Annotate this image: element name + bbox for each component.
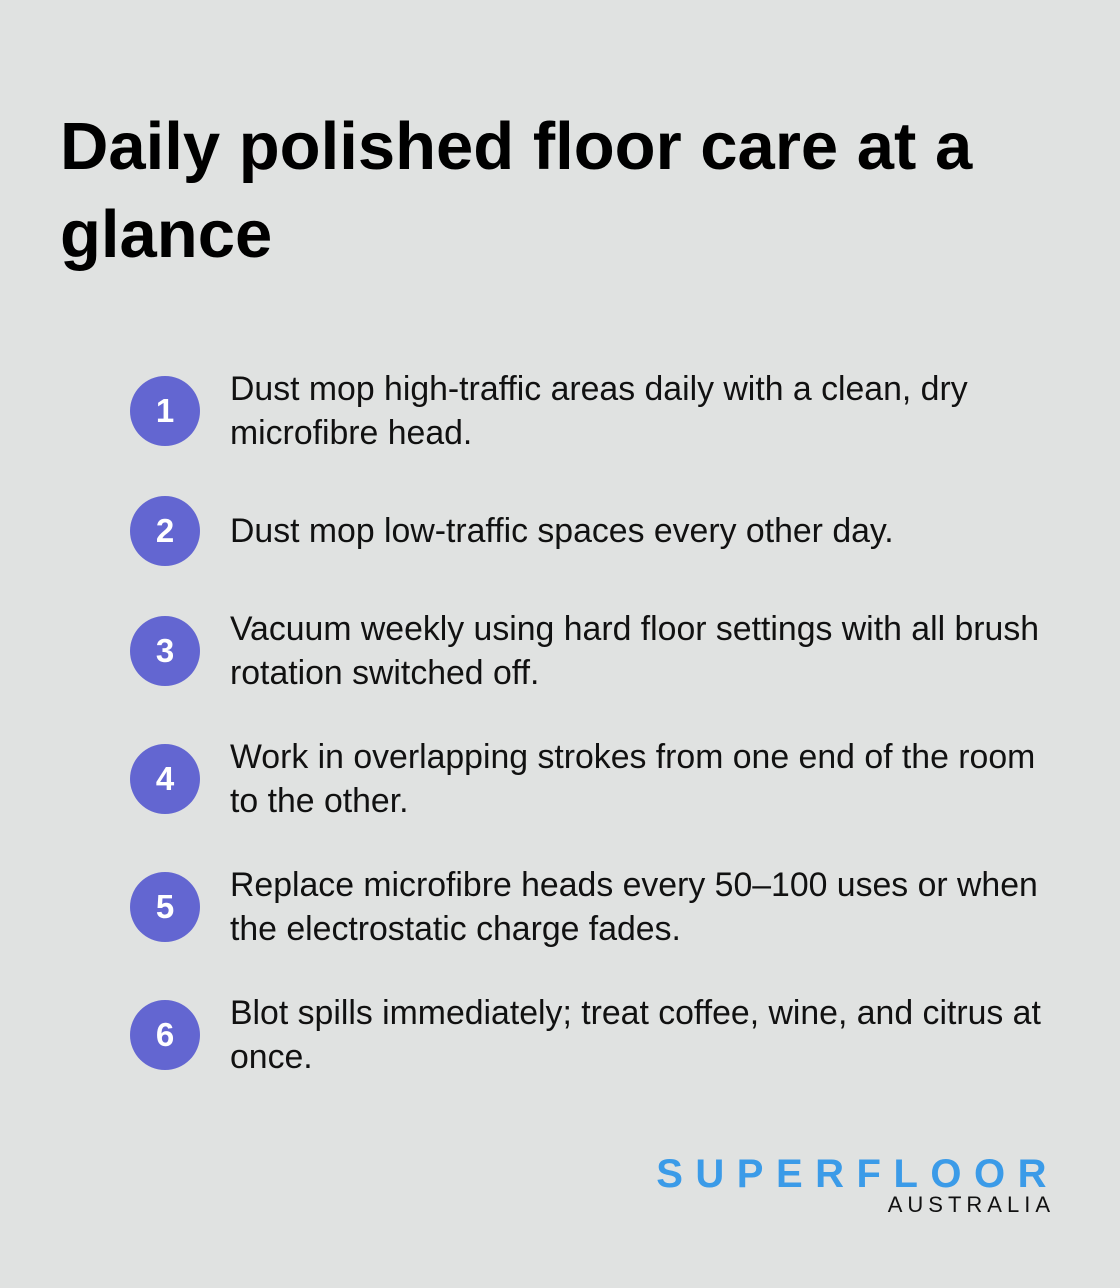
item 6: Blot spills immediately; treat coffee, wine, and citrus at (230, 994, 1041, 1032)
item 4 (130, 738, 1035, 820)
item 5 (130, 866, 1038, 948)
item 5: the electrostatic charge fades. (230, 910, 681, 948)
item 4: to the other. (230, 782, 409, 820)
item 2: 2 (156, 512, 174, 549)
logo (656, 1152, 1059, 1217)
item 1: 1 (156, 392, 174, 429)
item 6 (130, 994, 1041, 1076)
title: Daily polished floor care at a (60, 109, 972, 184)
item 6: once. (230, 1038, 313, 1076)
title: glance (60, 197, 272, 272)
item 1: Dust mop high-traffic areas daily with a clean, dry (230, 370, 968, 408)
item 2 (130, 496, 894, 566)
item 2: Dust mop low-traffic spaces every other day. (230, 512, 894, 550)
item 3: rotation switched off. (230, 654, 539, 692)
item 6: 6 (156, 1016, 174, 1053)
item 3: Vacuum weekly using hard floor settings with all brush (230, 610, 1039, 648)
item 3 (130, 610, 1039, 692)
item 5: Replace microfibre heads every 50–100 uses or when (230, 866, 1038, 904)
title (60, 109, 973, 272)
logo: SUPERFLOOR (656, 1152, 1059, 1196)
item 1: microfibre head. (230, 414, 472, 452)
item 4: 4 (156, 760, 174, 797)
item 5: 5 (156, 888, 174, 925)
item 1 (130, 370, 968, 452)
logo: AUSTRALIA (888, 1192, 1055, 1217)
item 3: 3 (156, 632, 174, 669)
item 4: Work in overlapping strokes from one end of the room (230, 738, 1035, 776)
